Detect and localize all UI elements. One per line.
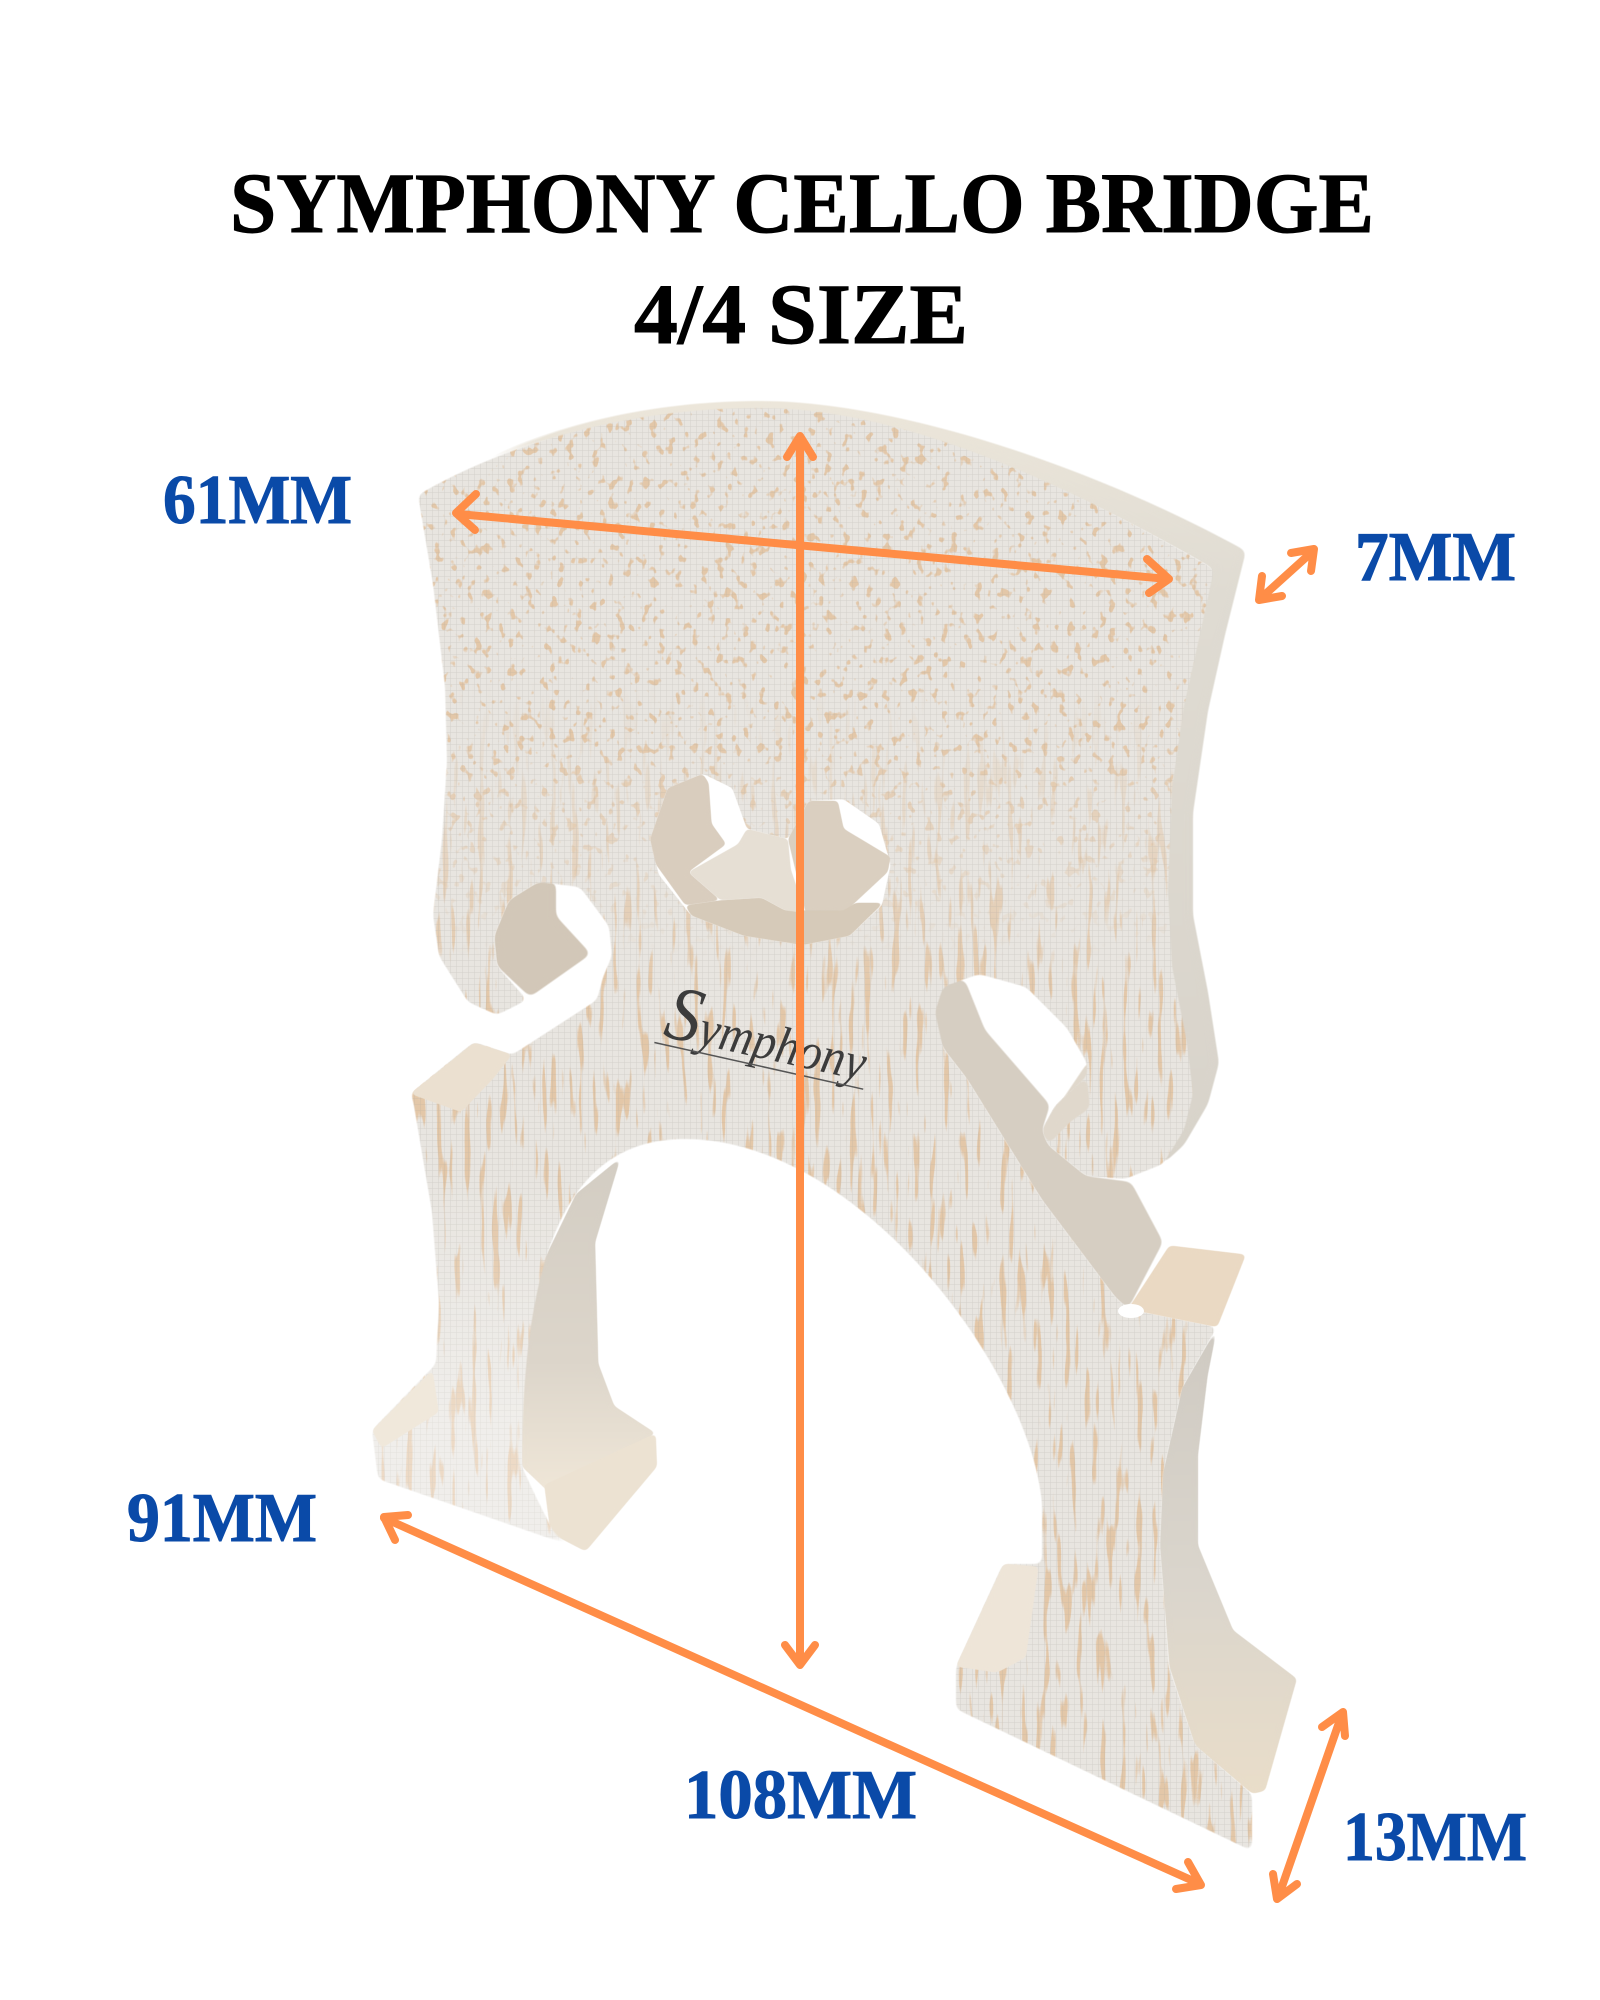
- bridge top and right side thickness: [418, 401, 1246, 1164]
- right lobe tip detail: [1042, 1076, 1090, 1145]
- label: 91mm: 91MM: [127, 1480, 317, 1557]
- title: [230, 155, 1374, 362]
- right lobe inner depth: [1042, 1060, 1100, 1130]
- label: 61mm: 61MM: [163, 462, 352, 539]
- right step top: [956, 1564, 1039, 1673]
- title: 4/4 SIZE: [634, 266, 968, 362]
- arrow: 61mm width across top: [456, 494, 1169, 593]
- right lobe depth: [788, 801, 891, 913]
- label: 108mm: 108MM: [684, 1757, 917, 1834]
- cello bridge illustration: [360, 390, 1297, 1870]
- arrow: 91mm foot span: [384, 1515, 1201, 1889]
- right hole channel depth: [930, 980, 1163, 1309]
- left foot bevel: [372, 1370, 439, 1448]
- arrow: 7mm thickness: [1259, 549, 1314, 600]
- left step top: [410, 1042, 512, 1112]
- left lobe depth: [650, 774, 726, 905]
- right foot top: [1128, 1245, 1246, 1327]
- arrow: 13mm foot depth: [1273, 1712, 1345, 1899]
- label: 13mm: 13MM: [1343, 1799, 1527, 1876]
- center sound hole: [650, 774, 891, 945]
- lower depth: [685, 898, 884, 945]
- left foot end cap: [544, 1433, 657, 1551]
- right leg inner depth: [1160, 1327, 1297, 1794]
- infographic canvas: [128, 174, 1526, 1903]
- left leg inner depth: [522, 1158, 656, 1497]
- glue spot: [1118, 1304, 1144, 1318]
- left hole depth: [494, 882, 591, 997]
- arrow: 108mm height: [785, 436, 815, 1665]
- Symphony logo: Symphony: [658, 968, 878, 1097]
- center island: [688, 829, 806, 913]
- hole opening: [650, 774, 891, 945]
- bridge front face: [360, 390, 1260, 1870]
- label: 7mm: 7MM: [1355, 519, 1516, 596]
- title: SYMPHONY CELLO BRIDGE: [230, 155, 1374, 251]
